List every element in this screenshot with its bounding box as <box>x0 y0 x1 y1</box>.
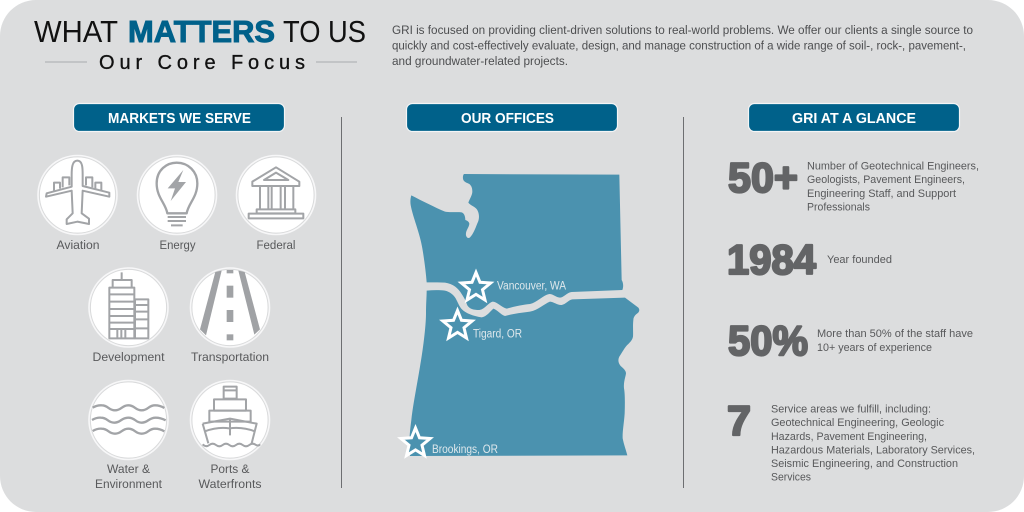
label: Brookings: Brookings, OR <box>432 444 498 456</box>
heading: our offices: OUR OFFICES <box>461 111 554 127</box>
title: WHAT <box>34 14 118 49</box>
stat: 50%: 50% <box>728 317 808 364</box>
stat: 50+: Geologists, Pavement Engineers, <box>807 174 965 186</box>
market: ports and waterfronts: Waterfronts <box>198 477 262 491</box>
panel: GRI at a glance <box>727 154 979 484</box>
label: Federal <box>256 238 296 252</box>
market: transportation <box>190 268 270 364</box>
stat: 7: Geotechnical Engineering, Geologic <box>771 417 944 429</box>
intro paragraph: quickly and cost-effectively evaluate, design, and manage construction of a wide range of soil-, rock-, pavement-, <box>392 38 966 52</box>
heading: markets we serve: MARKETS WE SERVE <box>108 111 251 127</box>
icon: office towers <box>109 272 148 338</box>
label: Ports & <box>210 462 250 476</box>
label: Development <box>92 350 165 364</box>
stat: 50+ <box>728 154 979 214</box>
divider left <box>340 117 342 488</box>
stat: 1984 <box>727 236 892 283</box>
icon: light bulb <box>157 163 197 225</box>
map shape: Oregon <box>409 290 639 456</box>
icon: columned building <box>249 167 303 218</box>
stat: 7: Services <box>771 472 811 484</box>
stat: 7: 7 <box>727 397 751 444</box>
stat: 50+: Number of Geotechnical Engineers, <box>807 160 979 172</box>
icon: waves <box>92 405 166 434</box>
stat: 50+: Engineering Staff, and Support <box>807 188 957 200</box>
stat: 50%: 10+ years of experience <box>817 342 932 354</box>
stat: 1984: Year founded <box>827 254 892 266</box>
icon: ship <box>203 387 260 446</box>
star: Brookings <box>401 428 430 456</box>
market: water and environment <box>89 380 168 491</box>
heading: GRI at a glance: GRI AT A GLANCE <box>792 111 916 127</box>
label: Transportation <box>191 350 269 364</box>
panel: markets <box>38 156 316 491</box>
stat: 50+: 50+ <box>728 154 798 201</box>
stat: 1984: 1984 <box>727 236 817 283</box>
market: water and environment: Environment <box>95 477 163 491</box>
market: energy <box>138 156 216 252</box>
stat: 7: Hazardous Materials, Laboratory Services, <box>771 444 975 456</box>
market: development <box>89 268 168 364</box>
heading: markets we serve <box>74 104 284 132</box>
map shape: Washington <box>410 174 623 310</box>
label: Aviation <box>56 238 100 252</box>
heading: GRI at a glance <box>748 104 960 132</box>
label: Water & <box>107 462 151 476</box>
intro paragraph: GRI is focused on providing client-driven solutions to real-world problems. We offer our clients a single source to <box>392 23 973 37</box>
stat: 50%: More than 50% of the staff have <box>817 328 973 340</box>
stat: 50+: Professionals <box>807 202 870 214</box>
map: Washington and Oregon <box>401 174 639 456</box>
title: MATTERS <box>128 14 275 49</box>
title: TO US <box>283 14 366 49</box>
star: Vancouver <box>461 272 491 300</box>
market: ports and waterfronts <box>190 380 270 491</box>
heading: our offices <box>406 104 618 132</box>
stat: 50% <box>728 317 973 364</box>
stat: 7: Hazards, Pavement Engineering, <box>771 431 927 443</box>
intro paragraph: and groundwater-related projects. <box>392 54 568 68</box>
divider right <box>682 117 684 488</box>
stat: 7: Seismic Engineering, and Construction <box>771 458 958 470</box>
intro paragraph <box>392 23 973 68</box>
subtitle: Our Core Focus <box>99 52 305 74</box>
stat: 7 <box>727 397 975 484</box>
title <box>34 14 366 49</box>
market: aviation <box>38 156 117 252</box>
label: Tigard: Tigard, OR <box>473 328 522 340</box>
label: Vancouver: Vancouver, WA <box>497 280 566 292</box>
star: Tigard <box>443 310 472 338</box>
icon: road <box>200 270 260 340</box>
market: federal <box>236 156 316 252</box>
stat: 7: Service areas we fulfill, including: <box>771 404 931 416</box>
label: Energy <box>160 238 196 252</box>
icon: airplane <box>46 161 109 224</box>
